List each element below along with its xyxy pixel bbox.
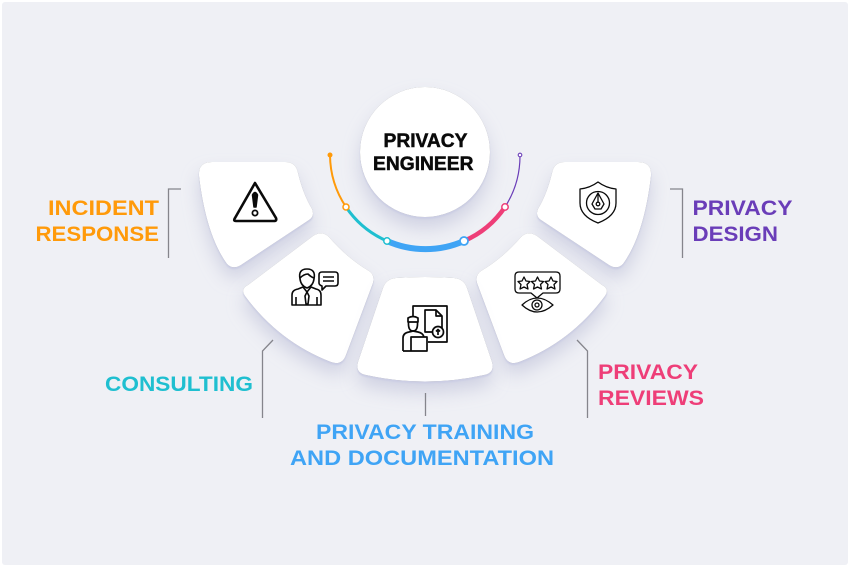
central circle <box>360 87 490 217</box>
label: privacy reviews: PRIVACY <box>598 361 698 384</box>
leader line: consulting <box>262 340 273 418</box>
label: privacy training and documentation <box>290 421 554 470</box>
icon: warning triangle <box>234 183 276 221</box>
label: consulting: CONSULTING <box>105 373 253 396</box>
leader line: privacy training <box>424 393 426 416</box>
heading: privacy engineer <box>373 131 474 175</box>
arc connector <box>328 152 522 249</box>
label: privacy reviews <box>598 361 704 410</box>
label: incident response <box>36 197 159 246</box>
leader line: incident response <box>168 189 181 258</box>
leader line: privacy design <box>670 189 682 258</box>
label: privacy design <box>692 197 792 246</box>
label: privacy training and documentation: AND DOCUMENTATION <box>290 447 554 470</box>
heading: privacy engineer: PRIVACY <box>384 131 468 152</box>
icon: training and documentation <box>403 306 447 351</box>
label: incident response: INCIDENT <box>48 197 159 220</box>
card: privacy training <box>357 277 493 382</box>
label: privacy design: PRIVACY <box>692 197 792 220</box>
card: incident response <box>199 162 313 267</box>
card: privacy reviews <box>476 233 607 363</box>
label: privacy reviews: REVIEWS <box>598 387 704 410</box>
card: privacy design <box>537 162 651 267</box>
label: incident response: RESPONSE <box>36 223 159 246</box>
icon: star ratings and eye <box>515 272 560 312</box>
heading: privacy engineer: ENGINEER <box>373 154 474 175</box>
label: privacy design: DESIGN <box>692 223 778 246</box>
icon: shield with pen nib <box>580 182 616 223</box>
icon: consultant with speech bubble <box>292 269 338 305</box>
leader line: privacy reviews <box>577 340 588 418</box>
card: consulting <box>243 233 374 363</box>
label: privacy training and documentation: PRIVACY TRAINING <box>316 421 534 444</box>
